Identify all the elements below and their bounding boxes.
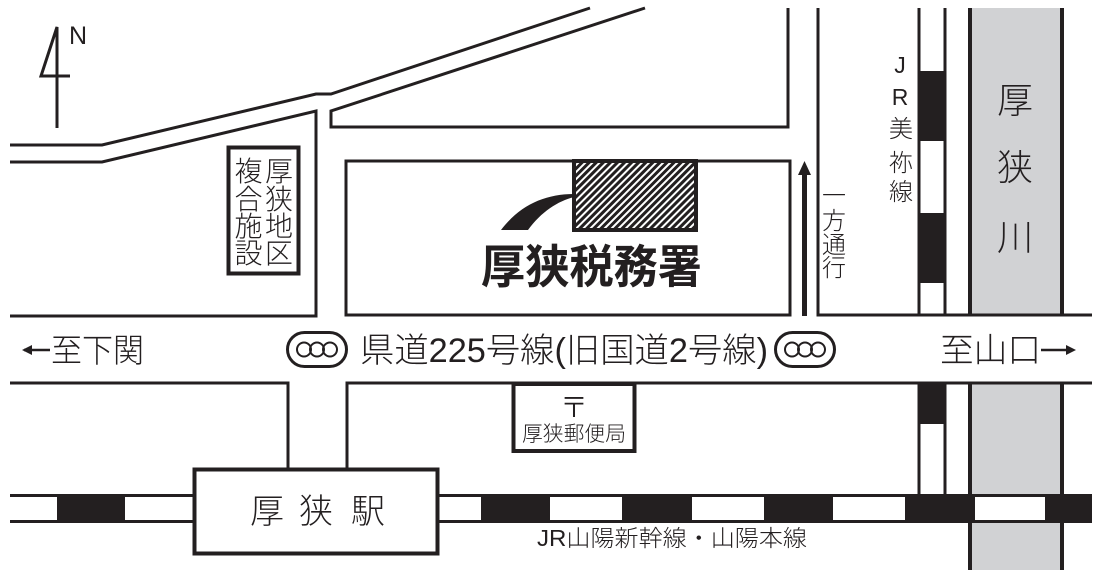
label: 厚狭地区複合施設: 地 [265,205,293,245]
north arrow: N [69,22,87,50]
station box: 厚狭駅: 狭 [299,484,333,533]
label: 厚狭地区複合施設: 施 [234,205,263,245]
station box: 厚狭駅: 厚 [250,484,284,533]
label: JR美祢線: 線 [889,172,913,207]
station box: 厚狭駅: 駅 [351,484,385,533]
label: JR美祢線: 祢 [889,143,913,178]
river: 厚狭川: 狭 [997,139,1033,191]
label: JR美祢線: 美 [889,109,913,144]
tax office building block [346,161,790,315]
label: 厚狭地区複合施設: 厚 [265,150,293,190]
JR山陽新幹線 track [10,494,1092,523]
river: 厚狭川: 厚 [997,72,1033,124]
label: 厚狭地区複合施設: 設 [234,232,263,272]
one-way arrow [798,161,811,316]
post office box: 〒 [560,386,588,426]
post office box: 厚狭郵便局 [522,418,626,448]
station box: 厚狭駅 [194,470,438,554]
label: 厚狭地区複合施設 [228,148,298,274]
tax office marker: hatched building [574,161,696,230]
label: 厚狭地区複合施設: 合 [234,178,263,218]
label: JR山陽新幹線・山陽本線: JR山陽新幹線・山陽本線 [537,525,807,551]
label: JR美祢線 [889,52,913,207]
label: road name: 県道225号線(旧国道2号線) [360,332,768,370]
route marker east [776,332,834,366]
north arrow [41,22,87,128]
label: JR美祢線: R [892,84,908,110]
label: 一方通行: 行 [822,248,846,283]
label: 一方通行: 方 [822,201,846,236]
label: 一方通行 [822,176,846,283]
label: 厚狭地区複合施設: 狭 [265,178,293,218]
curved pointer to building [501,194,574,230]
heading: 厚狭税務署: 厚狭税務署 [481,231,702,297]
label: 至下関: 至下関 [51,324,144,372]
post office box [514,384,634,451]
river: 厚狭川 [969,8,1062,570]
label: 厚狭地区複合施設: 区 [265,232,293,272]
river: 厚狭川: 川 [997,209,1033,261]
label: 厚狭地区複合施設: 複 [234,150,263,190]
JR美祢線 track north [918,8,946,315]
JR美祢線 track south [918,383,946,494]
road network outlines [10,8,1092,468]
label: 一方通行: 通 [822,225,846,260]
label: 至山口: 至山口 [940,323,1041,372]
label: 一方通行: 一 [822,176,846,211]
label: JR美祢線: J [894,52,906,78]
route marker west [288,332,346,366]
